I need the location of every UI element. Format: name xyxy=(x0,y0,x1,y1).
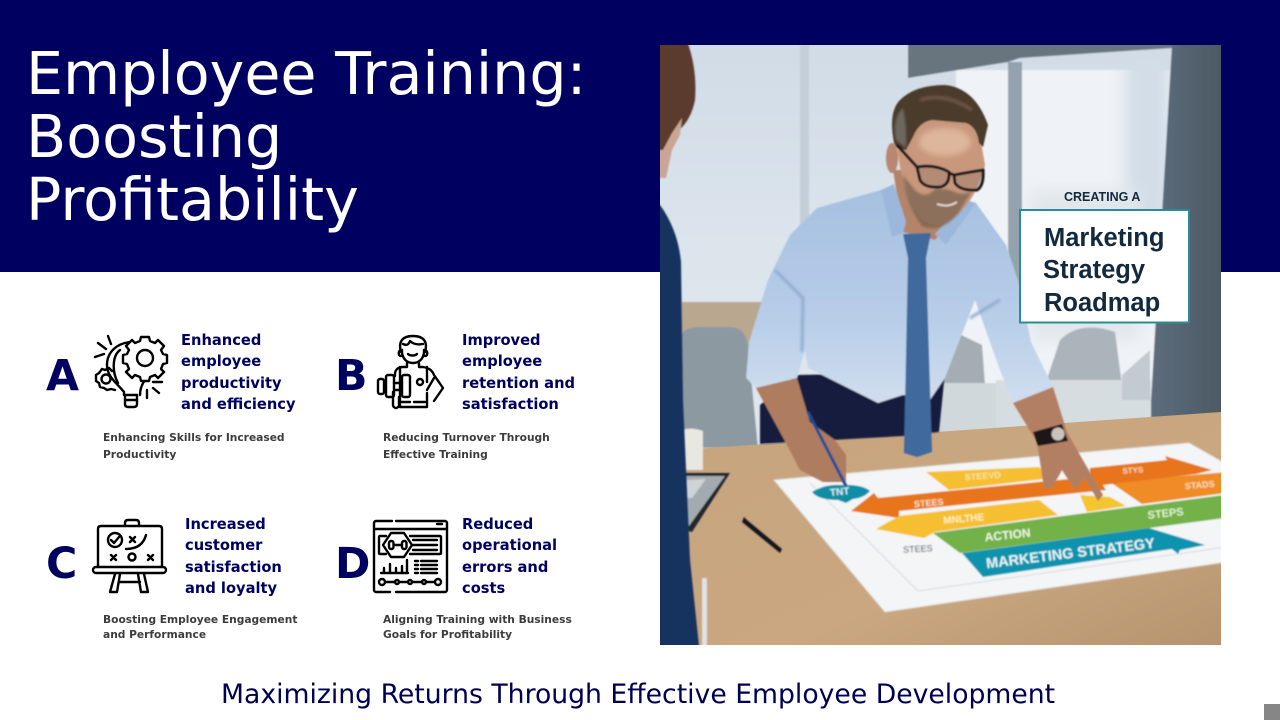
description D: Aligning Training with Business xyxy=(383,613,572,626)
teal start marker xyxy=(812,485,870,503)
heading A: and efficiency xyxy=(181,396,296,413)
caption: creating a marketing strategy roadmap: Strategy xyxy=(1043,256,1146,284)
heading C: customer xyxy=(185,537,262,554)
heading C: satisfaction xyxy=(185,559,282,576)
office background xyxy=(640,25,1240,665)
heading D: errors and xyxy=(462,559,548,576)
poster labels: MNLTHE xyxy=(943,512,985,527)
heading A: Enhanced xyxy=(181,332,261,349)
ear xyxy=(886,143,898,173)
description C: and Performance xyxy=(103,628,206,641)
beard xyxy=(903,175,972,228)
green band xyxy=(933,493,1240,553)
heading C: and loyalty xyxy=(185,580,277,597)
description A: Productivity xyxy=(103,448,176,461)
laptop xyxy=(684,473,730,532)
trousers xyxy=(760,372,945,444)
description C: Boosting Employee Engagement xyxy=(103,613,297,626)
heading A xyxy=(181,332,296,413)
heading D: costs xyxy=(462,580,505,597)
panel: benefit B xyxy=(335,332,575,461)
black pen xyxy=(742,517,782,553)
panel: benefit D xyxy=(335,516,572,641)
poster labels: ACTION xyxy=(984,526,1031,544)
description C xyxy=(103,613,298,641)
roadmap poster xyxy=(774,443,1240,612)
poster labels xyxy=(829,465,1215,572)
poster labels: STEPS xyxy=(1147,506,1184,522)
icon: strategy board on easel xyxy=(92,518,168,594)
description D xyxy=(383,613,572,641)
heading B: satisfaction xyxy=(462,396,559,413)
title: Boosting xyxy=(26,103,282,171)
watch xyxy=(1033,424,1068,446)
heading C xyxy=(185,516,282,597)
heading B: retention and xyxy=(462,375,575,392)
poster labels: STEES xyxy=(903,543,933,555)
icon: employee with dumbbell xyxy=(376,334,444,410)
left colleague xyxy=(640,25,707,665)
middle yellow arrow xyxy=(876,500,1058,538)
heading C: Increased xyxy=(185,516,266,533)
corner marker xyxy=(1264,704,1280,720)
description B xyxy=(383,431,550,461)
description B: Reducing Turnover Through xyxy=(383,431,550,444)
heading D: operational xyxy=(462,537,557,554)
neck xyxy=(893,170,975,240)
hair xyxy=(892,85,988,150)
panel: benefit C xyxy=(46,516,298,641)
tie xyxy=(903,233,932,457)
letter A: A xyxy=(46,351,79,401)
poster labels: TNT xyxy=(829,486,850,499)
description A: Enhancing Skills for Increased xyxy=(103,431,285,444)
heading B xyxy=(462,332,575,413)
coffee cup xyxy=(680,428,703,470)
panel: benefit A xyxy=(46,332,296,461)
letter D: D xyxy=(335,539,370,589)
heading A: productivity xyxy=(181,375,282,392)
poster labels: MARKETING STRATEGY xyxy=(985,536,1156,572)
poster labels: STEEVD xyxy=(964,470,1002,482)
teal arrow xyxy=(962,528,1205,577)
poster labels: STADS xyxy=(1184,479,1215,491)
heading A: employee xyxy=(181,353,261,370)
blue pen xyxy=(808,412,846,486)
heading B: employee xyxy=(462,353,542,370)
man in blue shirt xyxy=(746,85,1103,501)
title: Profitability xyxy=(26,166,359,234)
description B: Effective Training xyxy=(383,448,488,461)
heading D xyxy=(462,516,557,597)
header band xyxy=(0,0,1280,272)
right orange arrow xyxy=(1110,471,1240,504)
footer tagline: Maximizing Returns Through Effective Employee Development xyxy=(221,679,1055,710)
left forearm and hand xyxy=(756,378,846,482)
shirt xyxy=(746,190,1053,403)
icon: lightbulb with gears xyxy=(94,334,168,408)
caption: creating a marketing strategy roadmap xyxy=(1020,190,1189,322)
face xyxy=(897,115,985,225)
description A xyxy=(103,431,285,461)
orange arrow xyxy=(851,456,1212,518)
icon: operations dashboard xyxy=(372,520,448,594)
letter C: C xyxy=(46,539,77,589)
table xyxy=(680,412,1221,645)
description D: Goals for Profitability xyxy=(383,628,512,641)
right forearm and hand xyxy=(1013,387,1103,501)
poster labels: STYS xyxy=(1122,465,1144,476)
caption: creating a marketing strategy roadmap: Marketing xyxy=(1044,224,1164,252)
glasses xyxy=(897,145,983,190)
letter B: B xyxy=(335,351,368,401)
photo: man working on a marketing strategy roadmap xyxy=(660,45,1221,645)
caption: creating a marketing strategy roadmap: CREATING A xyxy=(1064,190,1140,204)
collar xyxy=(881,184,976,245)
heading B: Improved xyxy=(462,332,540,349)
poster labels: STEES xyxy=(914,497,944,509)
heading D: Reduced xyxy=(462,516,533,533)
small yellow block xyxy=(1080,495,1126,512)
title: Employee Training: xyxy=(26,40,586,108)
top yellow arrow xyxy=(926,467,1053,490)
title xyxy=(26,40,586,234)
caption: creating a marketing strategy roadmap: Roadmap xyxy=(1044,289,1160,317)
